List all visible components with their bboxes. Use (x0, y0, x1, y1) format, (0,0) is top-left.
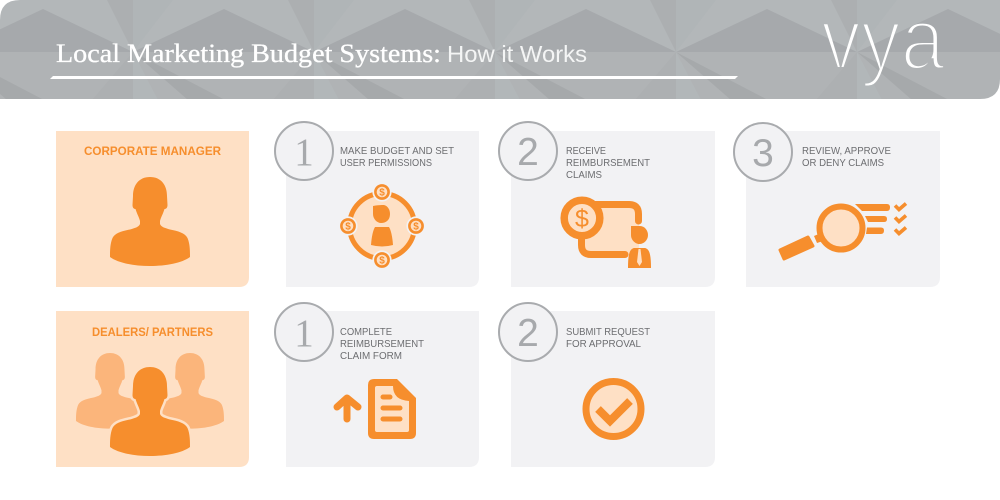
step number 2: 2 (517, 312, 539, 355)
panel: dealer step 1 (275, 303, 479, 467)
step text: SUBMIT REQUEST (566, 327, 650, 338)
panel: dealer step 2 (499, 303, 715, 467)
icon: budget ring with dollar coins (341, 185, 423, 267)
icon: budget ring with dollar coins: $ (379, 188, 385, 198)
step text (566, 146, 650, 181)
step text (340, 327, 424, 362)
step text: REIMBURSEMENT (340, 339, 424, 350)
icon: coin and claim to manager: $ (575, 205, 589, 233)
icon: group of three silhouettes (76, 353, 224, 456)
step text: REVIEW, APPROVE (802, 146, 891, 157)
panel: corporate step 2 (499, 122, 715, 287)
icon: approval check mark (586, 382, 641, 436)
panel: corporate step 1 (275, 122, 479, 287)
icon: budget ring with dollar coins: $ (379, 256, 385, 266)
heading: dealers and partners: DEALERS/ PARTNERS (92, 327, 213, 339)
panel: dealers and partners (56, 311, 249, 467)
header banner (0, 0, 1000, 99)
title: Local Marketing Budget Systems: (56, 39, 441, 68)
icon: manager silhouette (110, 177, 190, 266)
step text: REIMBURSEMENT (566, 158, 650, 169)
step text: OR DENY CLAIMS (802, 158, 884, 169)
step number 1 (275, 122, 333, 180)
panel: corporate step 3 (734, 123, 940, 287)
step text: CLAIM FORM (340, 351, 402, 362)
step text: RECEIVE (566, 146, 606, 157)
step text: USER PERMISSIONS (340, 158, 432, 169)
icon: magnifier with checklist (780, 204, 906, 259)
heading: corporate manager: CORPORATE MANAGER (84, 146, 222, 158)
icon: budget ring with dollar coins: $ (413, 222, 419, 232)
step text: MAKE BUDGET AND SET (340, 146, 454, 157)
icon: budget ring with dollar coins: $ (345, 222, 351, 232)
icon: coin and claim to manager (564, 200, 651, 268)
title: How it Works (447, 41, 587, 67)
step text (566, 327, 650, 350)
step number 1 (275, 303, 333, 361)
icon: upload arrow (337, 398, 358, 419)
step number 3 (734, 123, 792, 181)
step number 2 (499, 122, 557, 180)
step number 1: 1 (294, 312, 314, 355)
step text: CLAIMS (566, 170, 602, 181)
step number 2 (499, 303, 557, 361)
step number 3: 3 (752, 132, 774, 175)
icon: claim form document (368, 379, 416, 439)
step text (340, 146, 454, 169)
title (56, 39, 587, 68)
step number 1: 1 (294, 131, 314, 174)
step number 2: 2 (517, 131, 539, 174)
panel: corporate manager (56, 131, 249, 287)
step text: FOR APPROVAL (566, 339, 641, 350)
step text: COMPLETE (340, 327, 392, 338)
step text (802, 146, 891, 169)
